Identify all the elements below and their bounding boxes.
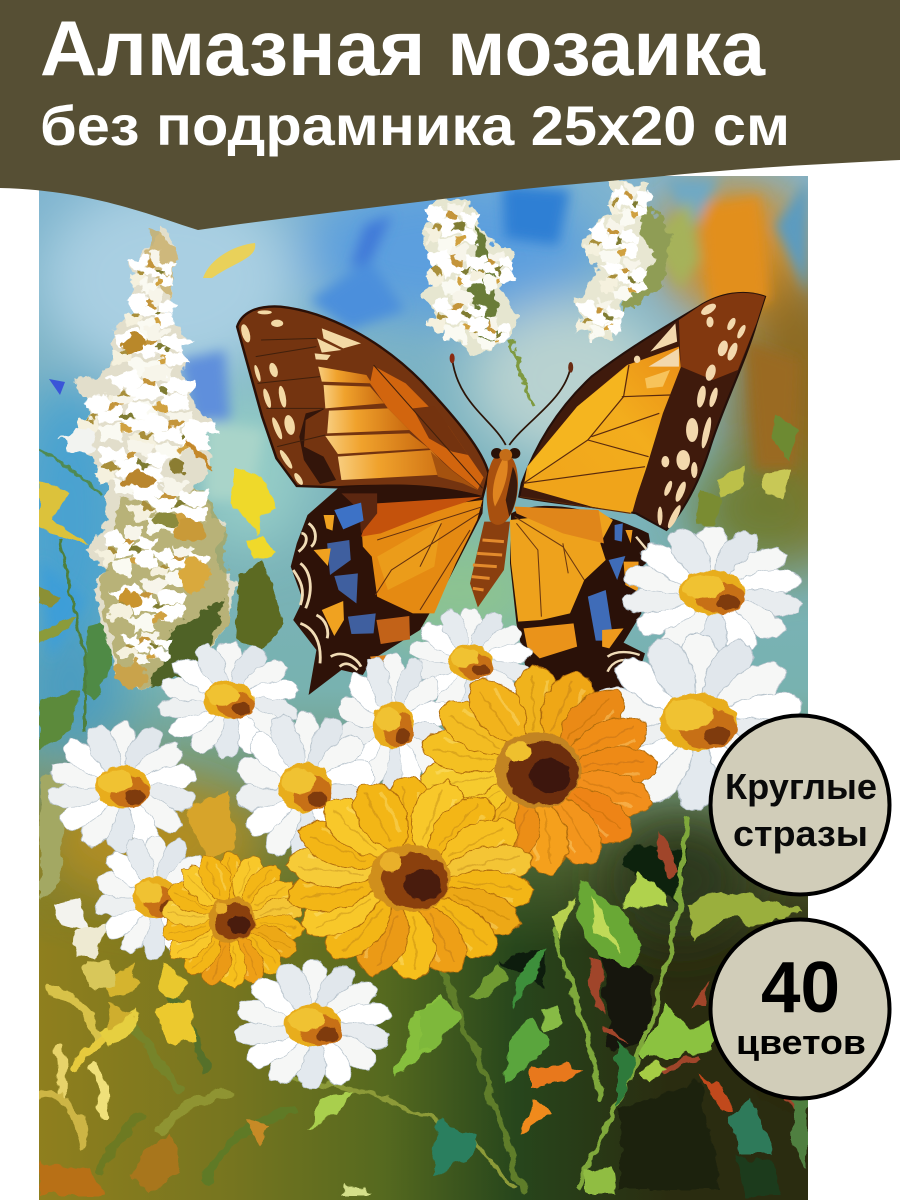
badge: 40 colours: цветов xyxy=(736,1024,866,1062)
daisy: middle left xyxy=(234,712,376,862)
sunflower: large left xyxy=(283,775,537,981)
daisy: right xyxy=(591,634,805,811)
badge: round rhinestones: стразы xyxy=(733,813,868,854)
left forewing xyxy=(237,306,489,497)
badge: round rhinestones xyxy=(710,716,890,894)
badge: 40 colours xyxy=(710,920,890,1098)
badge: 40 colours: 40 xyxy=(761,948,840,1028)
title: Алмазная мозаика xyxy=(40,4,766,92)
daisy: far left xyxy=(47,722,197,852)
daisy: lower left xyxy=(94,835,216,959)
right hindwing xyxy=(510,506,653,701)
flower cluster xyxy=(47,526,805,1089)
subtitle: без подрамника 25х20 см xyxy=(40,94,790,157)
sunflower: small orange xyxy=(159,851,305,989)
left hindwing xyxy=(291,484,484,695)
daisy: centre top xyxy=(409,608,534,703)
daisy: centre xyxy=(336,653,450,797)
white flower spire left xyxy=(59,227,236,695)
right forewing xyxy=(519,293,765,530)
white flower spire top centre xyxy=(420,197,535,408)
white flower spire top right xyxy=(575,180,672,340)
daisy: left upper xyxy=(158,642,300,758)
butterfly xyxy=(237,293,765,701)
daisy: top right xyxy=(621,526,803,658)
badge: round rhinestones: Круглые xyxy=(725,766,877,807)
painting: butterfly and flowers xyxy=(39,176,808,1200)
body xyxy=(470,448,520,607)
header banner xyxy=(0,0,900,230)
sunflower: large right xyxy=(416,665,659,876)
daisy: bottom xyxy=(234,961,392,1089)
plants: left yellow flowers and leaves xyxy=(39,415,798,750)
painted background xyxy=(39,176,808,1200)
lower foliage and stems xyxy=(40,770,808,1195)
antennae xyxy=(450,353,573,445)
